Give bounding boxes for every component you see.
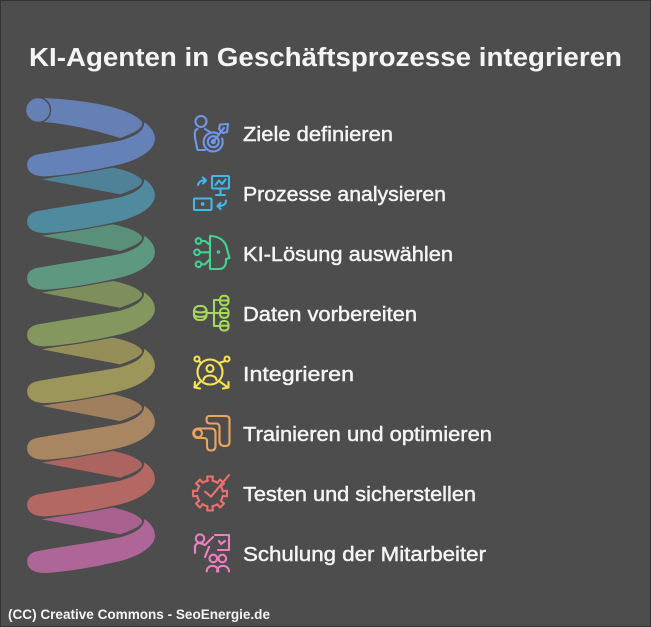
icon: process monitor: [194, 176, 229, 210]
icon: data tree: [194, 296, 228, 330]
spiral front band 6: [26, 404, 156, 460]
spiral back band 3: [42, 224, 142, 251]
spiral back band 6: [42, 394, 142, 421]
spiral back band 2: [42, 168, 142, 194]
spiral front band 2: [26, 178, 156, 234]
icon: integration hub: [194, 356, 230, 388]
label: KI-Lösung auswählen: KI-Lösung auswählen: [243, 244, 453, 266]
icon: person with target: [195, 116, 228, 151]
icon: AI head: [194, 236, 230, 269]
spiral front band 8: [26, 518, 156, 574]
spiral back band 7: [42, 451, 142, 478]
label: Schulung der Mitarbeiter: Schulung der Mitarbeiter: [243, 544, 486, 566]
title: KI-Agenten in Geschäftsprozesse integrieren: [29, 44, 622, 72]
spiral end cap: [26, 98, 50, 122]
spiral front band 3: [26, 234, 156, 290]
spiral back band 4: [42, 281, 142, 308]
spiral front band 7: [26, 461, 156, 517]
icon: gear with check: [193, 475, 229, 510]
spiral front band 4: [26, 291, 156, 347]
icon: optimisation shape: [193, 416, 230, 450]
label: Prozesse analysieren: Prozesse analysieren: [243, 184, 446, 206]
spiral back band 5: [42, 338, 142, 364]
spiral back band 8: [42, 508, 142, 534]
spiral front band 1: [26, 121, 156, 177]
icon: trainer with group: [195, 534, 229, 572]
label: Ziele definieren: Ziele definieren: [243, 124, 393, 146]
label: Daten vorbereiten: Daten vorbereiten: [243, 304, 417, 326]
label: Testen und sicherstellen: Testen und sicherstellen: [243, 484, 476, 506]
label: Integrieren: Integrieren: [243, 364, 354, 386]
label: Trainieren und optimieren: Trainieren und optimieren: [243, 424, 492, 446]
footer credit: (CC) Creative Commons - SeoEnergie.de: [8, 606, 270, 622]
spiral front band 5: [26, 348, 156, 404]
spiral graphic: [26, 98, 156, 574]
spiral back band 1: [44, 98, 142, 138]
